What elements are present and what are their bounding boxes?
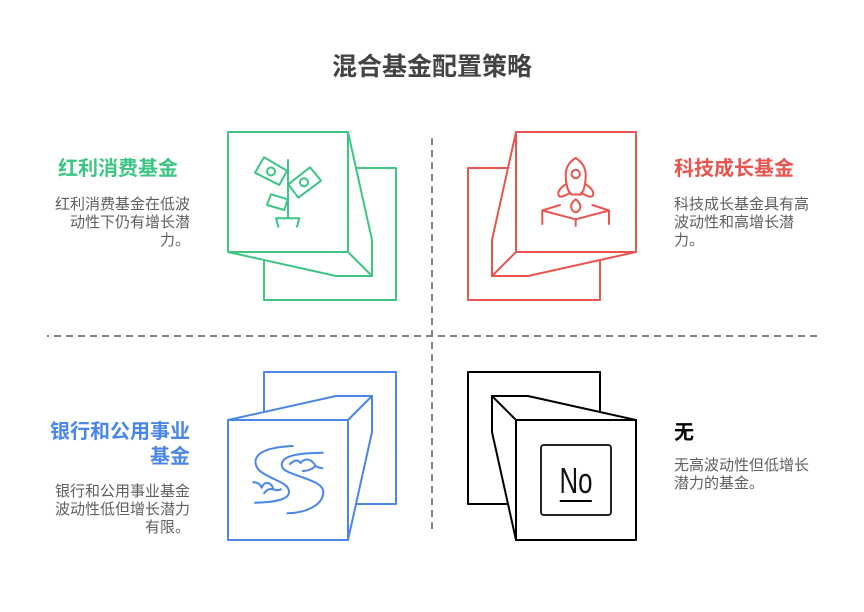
text: none: 潜力的基金。 [674,475,764,492]
icon: No badge: No [560,460,592,501]
text: dividend consumer fund: 力。 [160,232,190,249]
heading: bank and utility fund: 基金 [150,446,190,468]
quadrant: red cube [468,132,636,300]
icon: No badge [541,445,611,515]
icon: money plant [255,157,321,227]
text: dividend consumer fund [55,196,190,249]
text: dividend consumer fund: 动性下仍有增长潜 [70,214,190,231]
text: dividend consumer fund: 红利消费基金在低波 [55,196,190,213]
heading: bank and utility fund: 银行和公用事业 [50,421,190,443]
text: tech growth fund: 力。 [674,232,704,249]
text: bank and utility fund [55,483,190,536]
heading: tech growth fund: 科技成长基金 [674,158,794,180]
heading: bank and utility fund [50,420,190,468]
heading: dividend consumer fund: 红利消费基金 [58,158,178,180]
text: tech growth fund [674,196,809,249]
quadrant: blue cube [228,372,396,540]
heading: none: 无 [674,422,694,444]
text: bank and utility fund: 有限。 [145,519,190,536]
text: bank and utility fund: 波动性低但增长潜力 [55,501,190,518]
icon: winding river [253,446,323,513]
divider: dashed axes [47,138,817,534]
text: none [674,457,809,492]
icon: rocket launch [542,158,609,226]
text: tech growth fund: 波动性和高增长潜 [674,214,794,231]
quadrant: green cube [228,132,396,300]
title: 混合基金配置策略 [332,53,532,81]
text: none: 无高波动性但低增长 [674,457,809,474]
quadrant: black cube [468,372,636,540]
text: tech growth fund: 科技成长基金具有高 [674,196,809,213]
text: bank and utility fund: 银行和公用事业基金 [55,483,190,500]
